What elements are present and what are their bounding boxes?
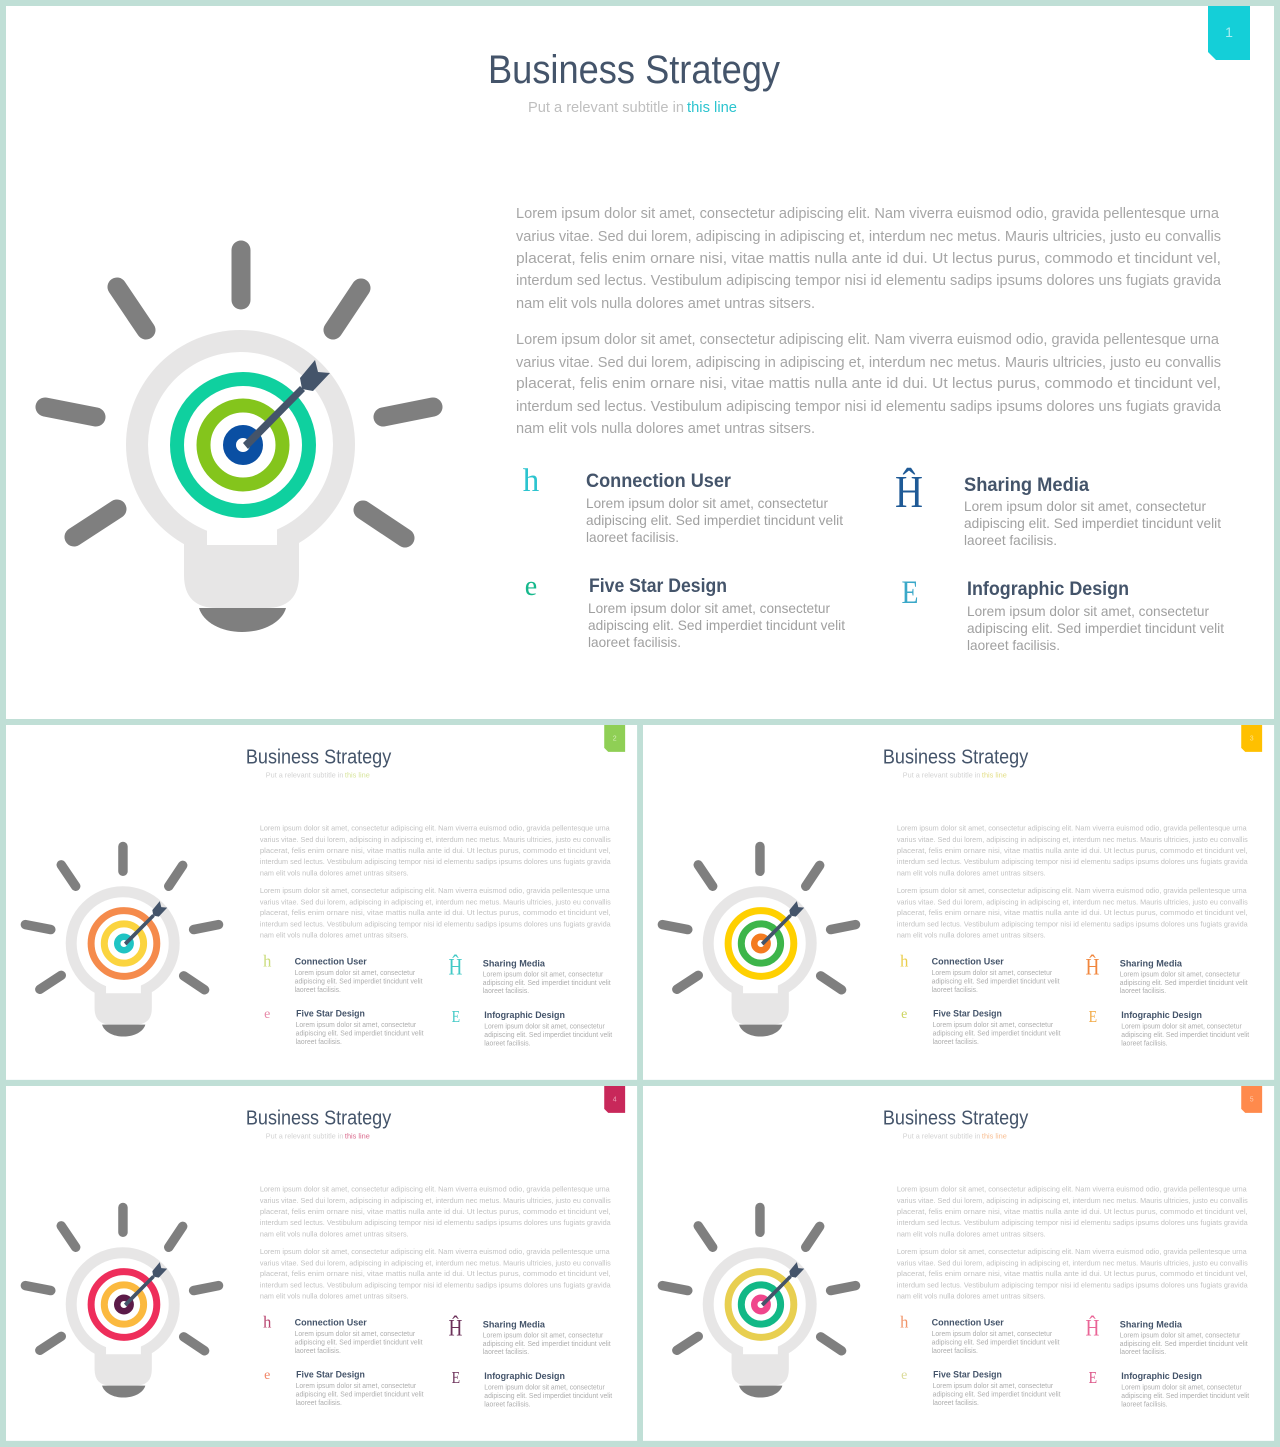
body paragraph 1: Lorem ipsum dolor sit amet, consectetur adipiscing elit. Nam viverra euismod odio, gravida pellentesque urna [260,1185,611,1194]
bulb cap [199,608,286,632]
feature: sharing media: laoreet facilisis. [483,988,529,995]
subtitle: Put a relevant subtitle in [528,99,684,116]
feature: sharing media: Lorem ipsum dolor sit amet, consectetur [483,1332,604,1339]
feature: connection user: Connection User [932,956,1004,967]
feature: infographic design: laoreet facilisis. [484,1402,531,1409]
feature: sharing media: Lorem ipsum dolor sit amet, consectetur [483,971,604,978]
feature: connection user: Lorem ipsum dolor sit amet, consectetur [932,1331,1053,1338]
title: Business Strategy [883,1107,1028,1129]
body paragraph 2: varius vitae. Sed dui lorem, adipiscing in adipiscing et, interdum nec metus. Mauris ultricies, justo eu convallis [260,898,611,907]
feature: five star design: e [525,571,537,602]
body paragraph 2: Lorem ipsum dolor sit amet, consectetur adipiscing elit. Nam viverra euismod odio, gravida pellentesque urna [897,886,1248,895]
body paragraph 1: Lorem ipsum dolor sit amet, consectetur adipiscing elit. Nam viverra euismod odio, gravida pellentesque urna [897,824,1248,833]
feature: infographic design: Infographic Design [967,579,1129,600]
feature: sharing media [895,466,1221,548]
feature: connection user: h [263,951,271,970]
feature: five star design [264,1368,424,1407]
bulb body [703,886,817,1025]
feature: sharing media: Ĥ [1085,1315,1099,1340]
feature: sharing media [448,1315,611,1356]
body paragraph 2: varius vitae. Sed dui lorem, adipiscing in adipiscing et, interdum nec metus. Mauris ultricies, justo eu convallis [260,1259,611,1268]
feature: sharing media: adipiscing elit. Sed imperdiet tincidunt velit [1120,980,1248,987]
body paragraph 1: nam elit vols nulla dolores amet untras sitsers. [516,295,815,312]
body paragraph 1: placerat, felis enim ornare nisi, vitae mattis nulla ante id dui. Ut lectus purus, commodo et tincidunt vel, [516,250,1221,267]
light rays [25,1207,219,1351]
page badge 2 [604,725,625,752]
body paragraph 2: Lorem ipsum dolor sit amet, consectetur adipiscing elit. Nam viverra euismod odio, gravida pellentesque urna [897,1247,1248,1256]
body paragraph 1: nam elit vols nulla dolores amet untras sitsers. [260,868,409,877]
page badge 1 [1208,6,1250,60]
body paragraph 1: nam elit vols nulla dolores amet untras sitsers. [897,1229,1046,1238]
feature: five star design: Lorem ipsum dolor sit amet, consectetur [296,1383,417,1390]
feature: sharing media: Sharing Media [483,958,546,969]
feature: sharing media: Lorem ipsum dolor sit amet, consectetur [1120,971,1241,978]
feature: connection user: adipiscing elit. Sed imperdiet tincidunt velit [586,512,843,528]
body paragraph 2 [260,886,612,940]
body paragraph 1: varius vitae. Sed dui lorem, adipiscing in adipiscing et, interdum nec metus. Mauris ultricies, justo eu convallis [260,1196,611,1205]
feature: five star design: e [264,1007,270,1022]
feature: five star design: e [264,1368,270,1383]
feature: infographic design: Lorem ipsum dolor sit amet, consectetur [1121,1385,1242,1392]
arrow [243,360,330,449]
body paragraph 1: interdum sed lectus. Vestibulum adipiscing tempor nisi id elementu sadips ipsums dolores uns fugiats gravida [516,272,1222,289]
subtitle: this line [345,771,370,780]
feature: sharing media: Lorem ipsum dolor sit amet, consectetur [1120,1332,1241,1339]
body paragraph 1: varius vitae. Sed dui lorem, adipiscing in adipiscing et, interdum nec metus. Mauris ultricies, justo eu convallis [516,228,1221,245]
title: Business Strategy [246,746,391,768]
feature: connection user [523,463,843,545]
feature: sharing media: Sharing Media [964,475,1089,496]
feature: connection user: Connection User [932,1317,1004,1328]
feature: sharing media: adipiscing elit. Sed imperdiet tincidunt velit [964,515,1221,531]
feature: five star design: Five Star Design [933,1009,1002,1020]
body paragraph 2: placerat, felis enim ornare nisi, vitae mattis nulla ante id dui. Ut lectus purus, commodo et tincidunt vel, [516,375,1221,392]
feature: infographic design [902,575,1224,653]
feature: infographic design: E [452,1007,460,1026]
page badge 1: 1 [1225,24,1233,40]
panel: slide 2 [6,725,637,1080]
body paragraph 2: interdum sed lectus. Vestibulum adipiscing tempor nisi id elementu sadips ipsums dolores uns fugiats gravida [516,398,1222,415]
body paragraph 2: Lorem ipsum dolor sit amet, consectetur adipiscing elit. Nam viverra euismod odio, gravida pellentesque urna [260,1247,611,1256]
body paragraph 2: nam elit vols nulla dolores amet untras sitsers. [897,1292,1046,1301]
title: Business Strategy [883,746,1028,768]
feature: infographic design: laoreet facilisis. [1121,1402,1168,1409]
bulb body [126,330,355,608]
feature: sharing media: adipiscing elit. Sed imperdiet tincidunt velit [483,1341,611,1348]
light rays [25,846,219,990]
body paragraph 2: nam elit vols nulla dolores amet untras sitsers. [260,931,409,940]
body paragraph 1: varius vitae. Sed dui lorem, adipiscing in adipiscing et, interdum nec metus. Mauris ultricies, justo eu convallis [897,835,1248,844]
body paragraph 2: varius vitae. Sed dui lorem, adipiscing in adipiscing et, interdum nec metus. Mauris ultricies, justo eu convallis [897,1259,1248,1268]
bulb cap [102,1386,145,1398]
subtitle: Put a relevant subtitle in [903,1132,980,1141]
body paragraph 1: interdum sed lectus. Vestibulum adipiscing tempor nisi id elementu sadips ipsums dolores uns fugiats gravida [260,1218,612,1227]
feature: five star design: laoreet facilisis. [933,1039,979,1046]
page badge 2: 2 [613,735,617,742]
icon: light bulb with target [25,846,219,1037]
feature: infographic design: laoreet facilisis. [967,637,1060,653]
icon: light bulb with target [45,250,433,632]
feature: connection user [900,1312,1060,1355]
feature: infographic design: E [902,575,918,611]
feature: infographic design: adipiscing elit. Sed imperdiet tincidunt velit [484,1393,612,1400]
body paragraph 2: interdum sed lectus. Vestibulum adipiscing tempor nisi id elementu sadips ipsums dolores uns fugiats gravida [260,920,612,929]
body paragraph 1: varius vitae. Sed dui lorem, adipiscing in adipiscing et, interdum nec metus. Mauris ultricies, justo eu convallis [897,1196,1248,1205]
body paragraph 1: placerat, felis enim ornare nisi, vitae mattis nulla ante id dui. Ut lectus purus, commodo et tincidunt vel, [260,846,611,855]
feature: five star design: Five Star Design [296,1370,365,1381]
body paragraph 2: nam elit vols nulla dolores amet untras sitsers. [897,931,1046,940]
body paragraph 2: placerat, felis enim ornare nisi, vitae mattis nulla ante id dui. Ut lectus purus, commodo et tincidunt vel, [260,908,611,917]
feature: sharing media: adipiscing elit. Sed imperdiet tincidunt velit [483,980,611,987]
panel: slide 3 [643,725,1274,1080]
body paragraph 2: varius vitae. Sed dui lorem, adipiscing in adipiscing et, interdum nec metus. Mauris ultricies, justo eu convallis [516,354,1221,371]
feature: infographic design: adipiscing elit. Sed imperdiet tincidunt velit [967,620,1224,636]
body paragraph 2: placerat, felis enim ornare nisi, vitae mattis nulla ante id dui. Ut lectus purus, commodo et tincidunt vel, [897,1269,1248,1278]
feature: sharing media [1085,954,1248,995]
feature: sharing media: Ĥ [1085,954,1099,979]
feature: five star design: Five Star Design [933,1370,1002,1381]
feature: infographic design: E [452,1368,460,1387]
feature: infographic design [452,1007,612,1048]
page badge 4: 4 [613,1096,617,1103]
feature: five star design: Five Star Design [589,576,727,597]
subtitle: Put a relevant subtitle in [903,771,980,780]
feature: connection user: h [263,1312,271,1331]
body paragraph 1: Lorem ipsum dolor sit amet, consectetur adipiscing elit. Nam viverra euismod odio, gravida pellentesque urna [260,824,611,833]
feature: sharing media: Ĥ [448,1315,462,1340]
title: Business Strategy [246,1107,391,1129]
body paragraph 1: interdum sed lectus. Vestibulum adipiscing tempor nisi id elementu sadips ipsums dolores uns fugiats gravida [897,857,1249,866]
feature: sharing media: adipiscing elit. Sed imperdiet tincidunt velit [1120,1341,1248,1348]
feature: five star design: Lorem ipsum dolor sit amet, consectetur [933,1383,1054,1390]
arrow [761,1262,804,1306]
body paragraph 1 [260,824,612,877]
bulb cap [739,1025,782,1037]
feature: connection user: laoreet facilisis. [295,1348,341,1355]
feature: connection user: Lorem ipsum dolor sit amet, consectetur [586,495,828,511]
feature: infographic design: laoreet facilisis. [1121,1041,1168,1048]
feature: five star design: Lorem ipsum dolor sit amet, consectetur [588,600,830,616]
feature: five star design: Lorem ipsum dolor sit amet, consectetur [933,1022,1054,1029]
feature: sharing media: laoreet facilisis. [1120,1349,1166,1356]
feature: sharing media: Ĥ [895,466,923,517]
feature: connection user: h [900,951,908,970]
feature: connection user: adipiscing elit. Sed imperdiet tincidunt velit [932,1339,1060,1346]
feature: infographic design: adipiscing elit. Sed imperdiet tincidunt velit [1121,1032,1249,1039]
body paragraph 1: Lorem ipsum dolor sit amet, consectetur adipiscing elit. Nam viverra euismod odio, gravida pellentesque urna [897,1185,1248,1194]
feature: infographic design: Infographic Design [484,1371,565,1382]
feature: five star design: adipiscing elit. Sed imperdiet tincidunt velit [933,1031,1061,1038]
feature: sharing media: laoreet facilisis. [964,532,1057,548]
arrow [124,901,167,945]
arrow [124,1262,167,1306]
body paragraph 2: placerat, felis enim ornare nisi, vitae mattis nulla ante id dui. Ut lectus purus, commodo et tincidunt vel, [260,1269,611,1278]
feature: sharing media: Ĥ [448,954,462,979]
bulb body [66,886,180,1025]
feature: sharing media: laoreet facilisis. [1120,988,1166,995]
feature: connection user: adipiscing elit. Sed imperdiet tincidunt velit [295,978,423,985]
feature: connection user: Connection User [586,471,732,492]
feature: infographic design: Lorem ipsum dolor sit amet, consectetur [967,603,1209,619]
body paragraph 2 [897,1247,1249,1301]
feature: connection user: Connection User [295,956,367,967]
feature: infographic design: Infographic Design [484,1010,565,1021]
bulb cap [739,1386,782,1398]
feature: infographic design: Infographic Design [1121,1371,1202,1382]
body paragraph 2: placerat, felis enim ornare nisi, vitae mattis nulla ante id dui. Ut lectus purus, commodo et tincidunt vel, [897,908,1248,917]
subtitle: this line [982,1132,1007,1141]
feature: infographic design: laoreet facilisis. [484,1041,531,1048]
panel: slide 5 [643,1086,1274,1441]
feature: infographic design: Lorem ipsum dolor sit amet, consectetur [1121,1024,1242,1031]
feature: connection user: adipiscing elit. Sed imperdiet tincidunt velit [932,978,1060,985]
body paragraph 1: Lorem ipsum dolor sit amet, consectetur adipiscing elit. Nam viverra euismod odio, gravida pellentesque urna [516,205,1220,222]
target rings [728,911,794,976]
feature: connection user: Lorem ipsum dolor sit amet, consectetur [295,1331,416,1338]
arrow [761,901,804,945]
bulb body [66,1247,180,1386]
body paragraph 1: nam elit vols nulla dolores amet untras sitsers. [260,1229,409,1238]
feature: five star design: adipiscing elit. Sed imperdiet tincidunt velit [296,1031,424,1038]
page badge 4 [604,1086,625,1113]
feature: connection user: laoreet facilisis. [932,987,978,994]
feature: five star design: laoreet facilisis. [933,1400,979,1407]
body paragraph 2 [260,1247,612,1301]
feature: connection user: adipiscing elit. Sed imperdiet tincidunt velit [295,1339,423,1346]
title: Business Strategy [488,48,780,92]
body paragraph 1: placerat, felis enim ornare nisi, vitae mattis nulla ante id dui. Ut lectus purus, commodo et tincidunt vel, [897,1207,1248,1216]
page badge 5: 5 [1250,1096,1254,1103]
feature: five star design: laoreet facilisis. [296,1400,342,1407]
feature: five star design: adipiscing elit. Sed imperdiet tincidunt velit [588,617,845,633]
light rays [662,846,856,990]
icon: light bulb with target [662,846,856,1037]
body paragraph 2: varius vitae. Sed dui lorem, adipiscing in adipiscing et, interdum nec metus. Mauris ultricies, justo eu convallis [897,898,1248,907]
page badge 3 [1241,725,1262,752]
body paragraph 1: placerat, felis enim ornare nisi, vitae mattis nulla ante id dui. Ut lectus purus, commodo et tincidunt vel, [260,1207,611,1216]
body paragraph 1 [260,1185,612,1238]
feature: five star design: e [901,1368,907,1383]
feature: infographic design [1089,1007,1249,1048]
feature: five star design: laoreet facilisis. [296,1039,342,1046]
subtitle: Put a relevant subtitle in [266,1132,343,1141]
feature: sharing media: Sharing Media [1120,1319,1183,1330]
feature: five star design: adipiscing elit. Sed imperdiet tincidunt velit [296,1392,424,1399]
feature: infographic design: Lorem ipsum dolor sit amet, consectetur [484,1024,605,1031]
body paragraph 2 [516,331,1222,437]
feature: five star design: e [901,1007,907,1022]
page badge 3: 3 [1250,735,1254,742]
feature: five star design [901,1007,1061,1046]
feature: infographic design: E [1089,1007,1097,1026]
feature: connection user [263,1312,423,1355]
feature: five star design: Five Star Design [296,1009,365,1020]
panel: slide 1 [6,6,1274,719]
bulb body [703,1247,817,1386]
body paragraph 1: interdum sed lectus. Vestibulum adipiscing tempor nisi id elementu sadips ipsums dolores uns fugiats gravida [897,1218,1249,1227]
subtitle: Put a relevant subtitle in [266,771,343,780]
feature: five star design: laoreet facilisis. [588,634,681,650]
light rays [662,1207,856,1351]
feature: connection user: Lorem ipsum dolor sit amet, consectetur [932,970,1053,977]
body paragraph 2: Lorem ipsum dolor sit amet, consectetur adipiscing elit. Nam viverra euismod odio, gravida pellentesque urna [260,886,611,895]
feature: connection user: h [900,1312,908,1331]
feature: five star design [901,1368,1061,1407]
subtitle: this line [345,1132,370,1141]
feature: connection user: laoreet facilisis. [586,529,679,545]
subtitle: this line [982,771,1007,780]
target rings [728,1272,794,1337]
feature: sharing media [1085,1315,1248,1356]
feature: connection user [900,951,1060,994]
icon: light bulb with target [25,1207,219,1398]
feature: infographic design [1089,1368,1249,1409]
body paragraph 2: Lorem ipsum dolor sit amet, consectetur adipiscing elit. Nam viverra euismod odio, gravida pellentesque urna [516,331,1220,348]
icon: light bulb with target [662,1207,856,1398]
body paragraph 2: nam elit vols nulla dolores amet untras sitsers. [260,1292,409,1301]
bulb cap [102,1025,145,1037]
feature: sharing media [448,954,611,995]
feature: connection user: laoreet facilisis. [295,987,341,994]
feature: five star design [525,571,845,650]
target rings [91,911,157,976]
feature: infographic design: adipiscing elit. Sed imperdiet tincidunt velit [1121,1393,1249,1400]
body paragraph 1 [516,205,1222,312]
body paragraph 1: nam elit vols nulla dolores amet untras sitsers. [897,868,1046,877]
feature: connection user: Connection User [295,1317,367,1328]
body paragraph 2: interdum sed lectus. Vestibulum adipiscing tempor nisi id elementu sadips ipsums dolores uns fugiats gravida [260,1281,612,1290]
body paragraph 1 [897,1185,1249,1238]
subtitle: this line [687,99,737,116]
feature: connection user: Lorem ipsum dolor sit amet, consectetur [295,970,416,977]
feature: infographic design: Lorem ipsum dolor sit amet, consectetur [484,1385,605,1392]
body paragraph 1: varius vitae. Sed dui lorem, adipiscing in adipiscing et, interdum nec metus. Mauris ultricies, justo eu convallis [260,835,611,844]
light rays [45,250,433,538]
feature: connection user [263,951,423,994]
panel: slide 4 [6,1086,637,1441]
feature: connection user: laoreet facilisis. [932,1348,978,1355]
body paragraph 1 [897,824,1249,877]
body paragraph 1: placerat, felis enim ornare nisi, vitae mattis nulla ante id dui. Ut lectus purus, commodo et tincidunt vel, [897,846,1248,855]
target rings [91,1272,157,1337]
feature: infographic design: adipiscing elit. Sed imperdiet tincidunt velit [484,1032,612,1039]
feature: sharing media: Sharing Media [1120,958,1183,969]
target rings [177,379,309,511]
feature: sharing media: Sharing Media [483,1319,546,1330]
body paragraph 2: interdum sed lectus. Vestibulum adipiscing tempor nisi id elementu sadips ipsums dolores uns fugiats gravida [897,920,1249,929]
feature: infographic design [452,1368,612,1409]
feature: five star design: adipiscing elit. Sed imperdiet tincidunt velit [933,1392,1061,1399]
feature: connection user: h [523,463,540,499]
feature: five star design: Lorem ipsum dolor sit amet, consectetur [296,1022,417,1029]
body paragraph 2 [897,886,1249,940]
page badge 5 [1241,1086,1262,1113]
feature: five star design [264,1007,424,1046]
feature: infographic design: Infographic Design [1121,1010,1202,1021]
body paragraph 2: interdum sed lectus. Vestibulum adipiscing tempor nisi id elementu sadips ipsums dolores uns fugiats gravida [897,1281,1249,1290]
feature: infographic design: E [1089,1368,1097,1387]
body paragraph 2: nam elit vols nulla dolores amet untras sitsers. [516,420,815,437]
feature: sharing media: laoreet facilisis. [483,1349,529,1356]
body paragraph 1: interdum sed lectus. Vestibulum adipiscing tempor nisi id elementu sadips ipsums dolores uns fugiats gravida [260,857,612,866]
feature: sharing media: Lorem ipsum dolor sit amet, consectetur [964,498,1206,514]
